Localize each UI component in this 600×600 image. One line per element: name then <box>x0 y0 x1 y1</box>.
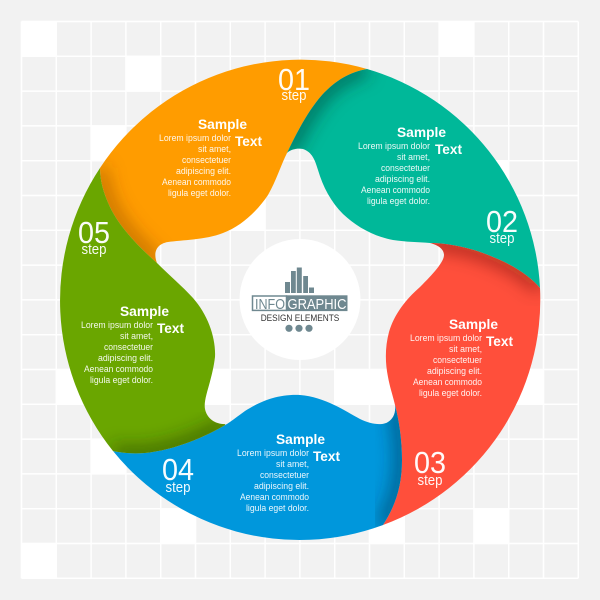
text block: green: consectetuer <box>104 342 153 352</box>
number: 05 step: step <box>82 241 106 258</box>
panel: step 01 orange <box>100 60 367 263</box>
text block: teal: Text <box>435 141 462 157</box>
text block: orange: adipiscing elit. <box>176 166 231 176</box>
text block: blue: ligula eget dolor. <box>246 503 309 513</box>
banner: INFOGRAPHIC: INFO <box>255 296 285 313</box>
text block: green: sit amet, <box>120 331 153 341</box>
text block: green: Lorem ipsum dolor <box>81 320 153 330</box>
text block: orange <box>159 116 262 198</box>
text block: teal: sit amet, <box>397 152 430 162</box>
banner: INFOGRAPHIC: GRAPHIC <box>288 296 347 313</box>
number: 03 step: 03 <box>414 445 446 480</box>
number: 05 step: 05 <box>78 215 110 250</box>
text block: teal: Sample <box>397 124 446 140</box>
text block: teal: consectetuer <box>381 163 430 173</box>
text block: orange: Text <box>235 133 262 149</box>
text block: orange: sit amet, <box>198 144 231 154</box>
text block: red <box>410 316 513 398</box>
text block: blue <box>237 431 340 513</box>
panel: step 02 teal <box>287 69 540 288</box>
text block: teal: ligula eget dolor. <box>367 196 430 206</box>
number: 02 step: 02 <box>486 204 518 239</box>
text block: green: Sample <box>120 303 169 319</box>
text block: red: ligula eget dolor. <box>419 388 482 398</box>
text block: red: Lorem ipsum dolor <box>410 333 482 343</box>
text block: blue: adipiscing elit. <box>254 481 309 491</box>
text block: blue: Lorem ipsum dolor <box>237 448 309 458</box>
text block: green: Aenean commodo <box>84 364 153 374</box>
number: 03 step: step <box>418 472 442 489</box>
text block: teal: Lorem ipsum dolor <box>358 141 430 151</box>
text block: red: sit amet, <box>449 344 482 354</box>
panel: step 05 green <box>55 160 227 460</box>
text block: teal <box>358 124 462 206</box>
number: 01 step: step <box>282 87 306 104</box>
text block: orange: Aenean commodo <box>162 177 231 187</box>
text block: orange: consectetuer <box>182 155 231 165</box>
panel: step 03 red <box>383 243 540 525</box>
text block: orange: Lorem ipsum dolor <box>159 133 231 143</box>
number: 01 step: 01 <box>278 62 310 97</box>
panel: step 04 blue <box>113 394 402 540</box>
text block: orange: Sample <box>198 116 247 132</box>
subtitle: design elements: DESIGN ELEMENTS <box>261 313 339 324</box>
text block: green <box>81 303 184 385</box>
text block: red: consectetuer <box>433 355 482 365</box>
text block: teal: Aenean commodo <box>361 185 430 195</box>
text block: red: Text <box>486 333 513 349</box>
text block: blue: Text <box>313 448 340 464</box>
icon: bar chart <box>285 268 314 293</box>
text block: orange: ligula eget dolor. <box>168 188 231 198</box>
text block: blue: Aenean commodo <box>240 492 309 502</box>
text block: green: ligula eget dolor. <box>90 375 153 385</box>
text block: blue: consectetuer <box>260 470 309 480</box>
center logo badge <box>240 239 360 360</box>
text block: teal: adipiscing elit. <box>375 174 430 184</box>
text block: green: adipiscing elit. <box>98 353 153 363</box>
number: 02 step: step <box>490 230 514 247</box>
text block: red: adipiscing elit. <box>427 366 482 376</box>
number: 04 step: 04 <box>162 452 194 487</box>
text block: blue: sit amet, <box>276 459 309 469</box>
text block: red: Aenean commodo <box>413 377 482 387</box>
number: 04 step: step <box>166 479 190 496</box>
text block: blue: Sample <box>276 431 325 447</box>
text block: red: Sample <box>449 316 498 332</box>
three dots <box>285 325 313 332</box>
banner: INFOGRAPHIC <box>252 295 348 313</box>
text block: green: Text <box>157 320 184 336</box>
